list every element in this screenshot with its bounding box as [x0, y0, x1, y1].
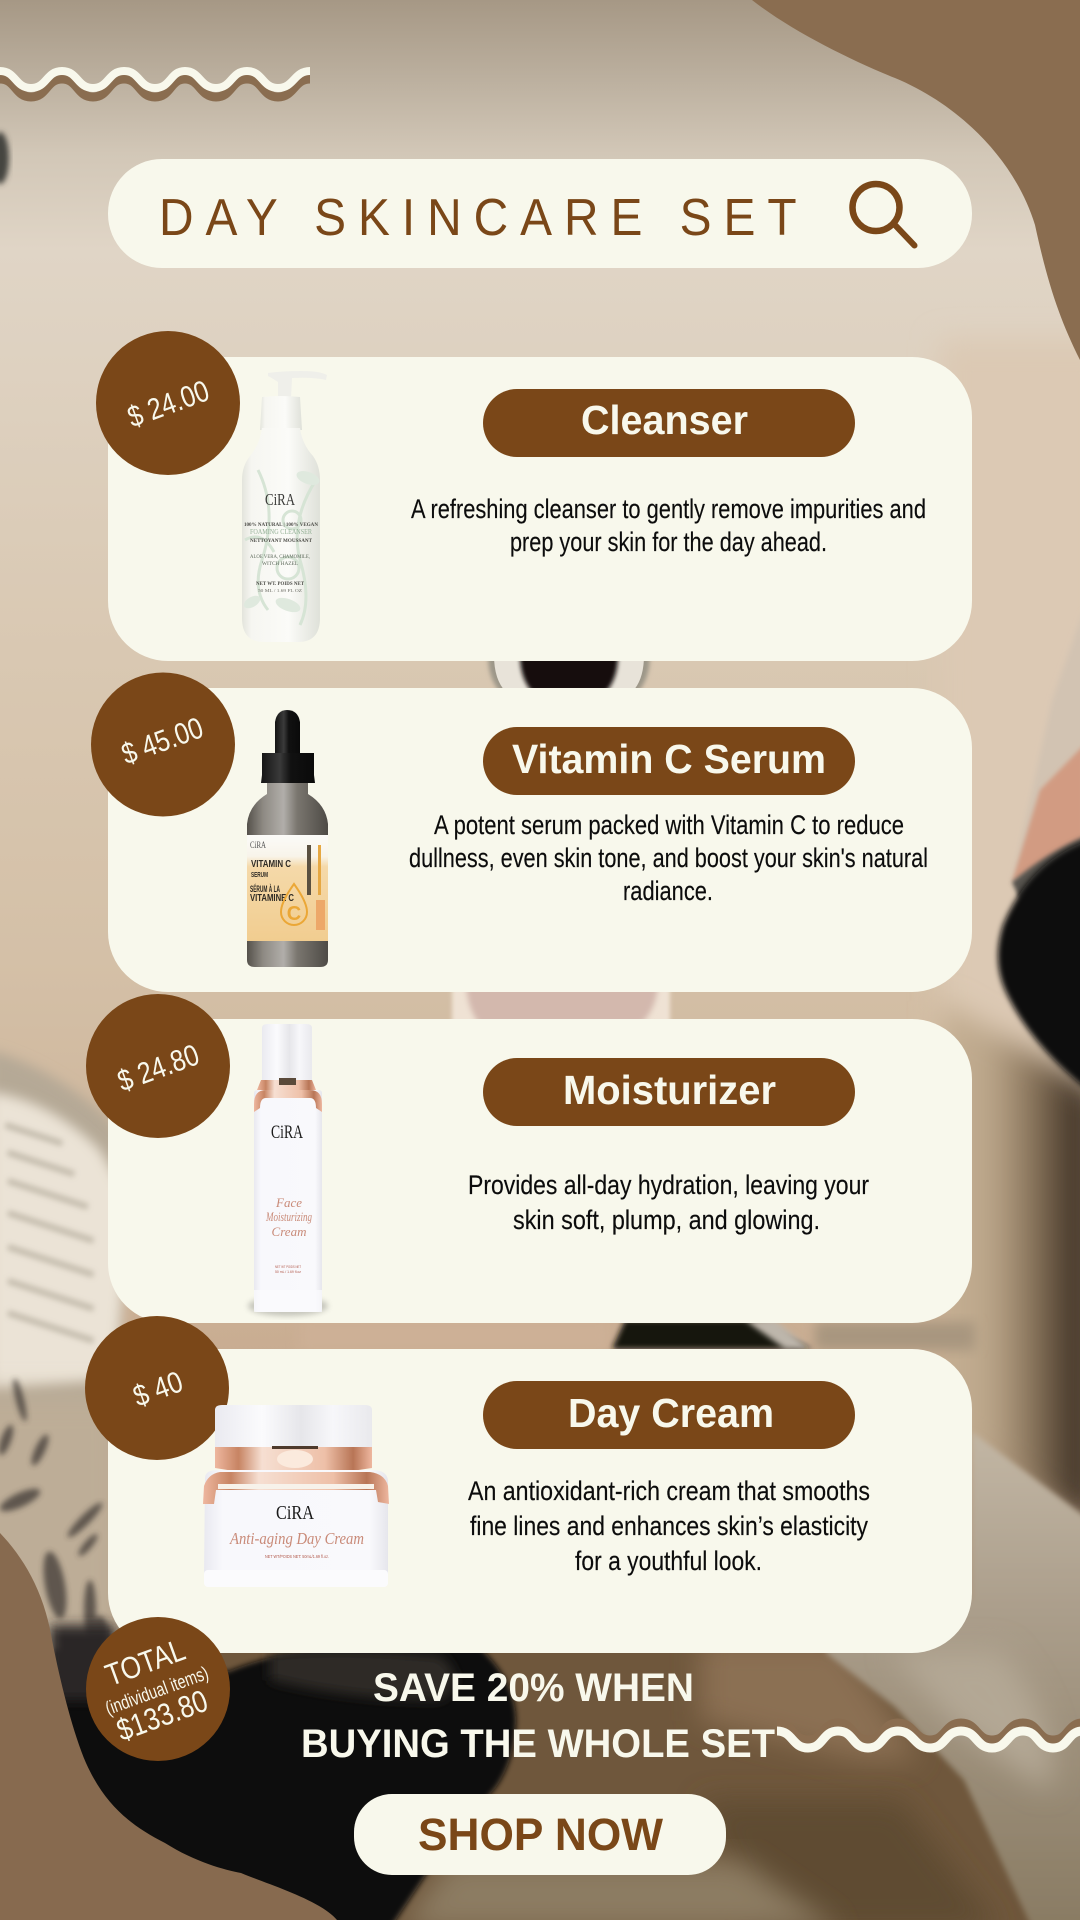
- product: moisturizer bottle: CiRA: [271, 1122, 303, 1143]
- description: moisturizer: [468, 1170, 869, 1235]
- product: vitamin c serum bottle: VITAMINE C: [250, 893, 294, 904]
- product: cleanser bottle: NET WT. POIDS NET: [256, 582, 305, 587]
- price badge: vitamin c serum: [91, 672, 235, 816]
- product heading: moisturizer: [483, 1058, 855, 1126]
- product heading: day cream: [483, 1381, 855, 1449]
- total badge: [86, 1617, 230, 1761]
- description: vitamin c serum: A potent serum packed with Vitamin C to reduce: [434, 810, 904, 840]
- wave: top left: [0, 71, 310, 97]
- panel: day cream: [108, 1349, 972, 1653]
- product: day cream jar: CiRA: [276, 1502, 314, 1524]
- button: shop now: [354, 1794, 726, 1875]
- description: day cream: An antioxidant-rich cream that smooths: [468, 1476, 870, 1506]
- product: cleanser bottle: [242, 371, 327, 642]
- product: cleanser bottle: 50 ML / 1.69 FL OZ: [258, 588, 302, 593]
- description: moisturizer: Provides all-day hydration, leaving your: [468, 1170, 869, 1200]
- product: cleanser bottle: ALOE VERA, CHAMOMILE,: [250, 555, 310, 560]
- product: moisturizer bottle: NET WT POIDS NET: [275, 1264, 301, 1269]
- callout: save 20%: SAVE 20% WHEN: [373, 1666, 694, 1710]
- title bar: [108, 159, 972, 268]
- description: day cream: fine lines and enhances skin’s elasticity: [470, 1511, 869, 1541]
- description: vitamin c serum: radiance.: [623, 876, 713, 906]
- product heading: cleanser: Cleanser: [581, 397, 748, 443]
- description: day cream: for a youthful look.: [575, 1546, 762, 1576]
- product: vitamin c serum bottle: SÉRUM À LA: [250, 884, 280, 894]
- description: cleanser: [411, 494, 926, 557]
- product: moisturizer bottle: Cream: [272, 1224, 306, 1239]
- total badge: TOTAL: [101, 1632, 190, 1693]
- panel: moisturizer: [108, 1019, 972, 1323]
- description: vitamin c serum: dullness, even skin tone, and boost your skin's natural: [409, 843, 928, 873]
- button: shop now: SHOP NOW: [418, 1809, 664, 1860]
- total badge: (individual items): [103, 1663, 212, 1720]
- product heading: cleanser: [483, 389, 855, 457]
- price badge: vitamin c serum: $ 45.00: [117, 712, 208, 771]
- description: cleanser: A refreshing cleanser to gently remove impurities and: [411, 494, 926, 524]
- price badge: cleanser: [96, 331, 240, 475]
- description: day cream: [468, 1476, 870, 1576]
- product: day cream jar: [203, 1405, 389, 1587]
- product: moisturizer bottle: Moisturizing: [265, 1209, 312, 1224]
- price badge: moisturizer: $ 24.80: [113, 1039, 204, 1098]
- product: day cream jar: NET WT/POIDS NET: 50mL/1.69 fl.oz.: [265, 1554, 329, 1559]
- price badge: day cream: [85, 1316, 229, 1460]
- price badge: moisturizer: [86, 994, 230, 1138]
- decorative blob: top right: [752, 0, 1080, 360]
- product heading: moisturizer: Moisturizer: [563, 1067, 776, 1113]
- price badge: cleanser: $ 24.00: [123, 375, 214, 434]
- product heading: vitamin c serum: [483, 727, 855, 795]
- description: moisturizer: skin soft, plump, and glowing.: [513, 1205, 820, 1235]
- product: cleanser bottle: 100% NATURAL | 100% VEGAN: [244, 523, 318, 528]
- panel: vitamin c serum: [108, 688, 972, 992]
- panel: cleanser: [108, 357, 972, 661]
- product: cleanser bottle: CiRA: [265, 490, 296, 509]
- product heading: vitamin c serum: Vitamin C Serum: [512, 736, 826, 782]
- description: vitamin c serum: [409, 810, 928, 906]
- description: cleanser: prep your skin for the day ahead.: [510, 527, 827, 557]
- price badge: day cream: $ 40: [129, 1365, 187, 1414]
- product: cleanser bottle: WITCH HAZEL: [262, 562, 298, 567]
- product: cleanser bottle: NETTOYANT MOUSSANT: [250, 538, 312, 544]
- product: moisturizer bottle: 50 mL / 1.69 fl.oz: [275, 1269, 301, 1274]
- decorative blob: bottom left: [0, 1533, 337, 1920]
- product: vitamin c serum bottle: SERUM: [251, 872, 268, 879]
- callout: save 20%: [301, 1666, 775, 1766]
- product: vitamin c serum bottle: CiRA: [250, 840, 266, 850]
- product: vitamin c serum bottle: VITAMIN C: [251, 859, 291, 870]
- product: moisturizer bottle: Face: [275, 1195, 302, 1210]
- product: cleanser bottle: FOAMING CLEANSER: [250, 528, 312, 536]
- product: vitamin c serum bottle: [247, 710, 328, 967]
- total badge: $133.80: [112, 1683, 212, 1748]
- icon: magnifying glass: [852, 184, 914, 246]
- title: DAY SKINCARE SET: [159, 188, 797, 246]
- product: day cream jar: Anti-aging Day Cream: [229, 1529, 364, 1548]
- wave: bottom right: [777, 1723, 1080, 1748]
- product: vitamin c serum bottle: C: [287, 903, 301, 925]
- callout: save 20%: BUYING THE WHOLE SET: [301, 1722, 775, 1766]
- product heading: day cream: Day Cream: [568, 1390, 774, 1436]
- product: moisturizer bottle: [248, 1024, 328, 1316]
